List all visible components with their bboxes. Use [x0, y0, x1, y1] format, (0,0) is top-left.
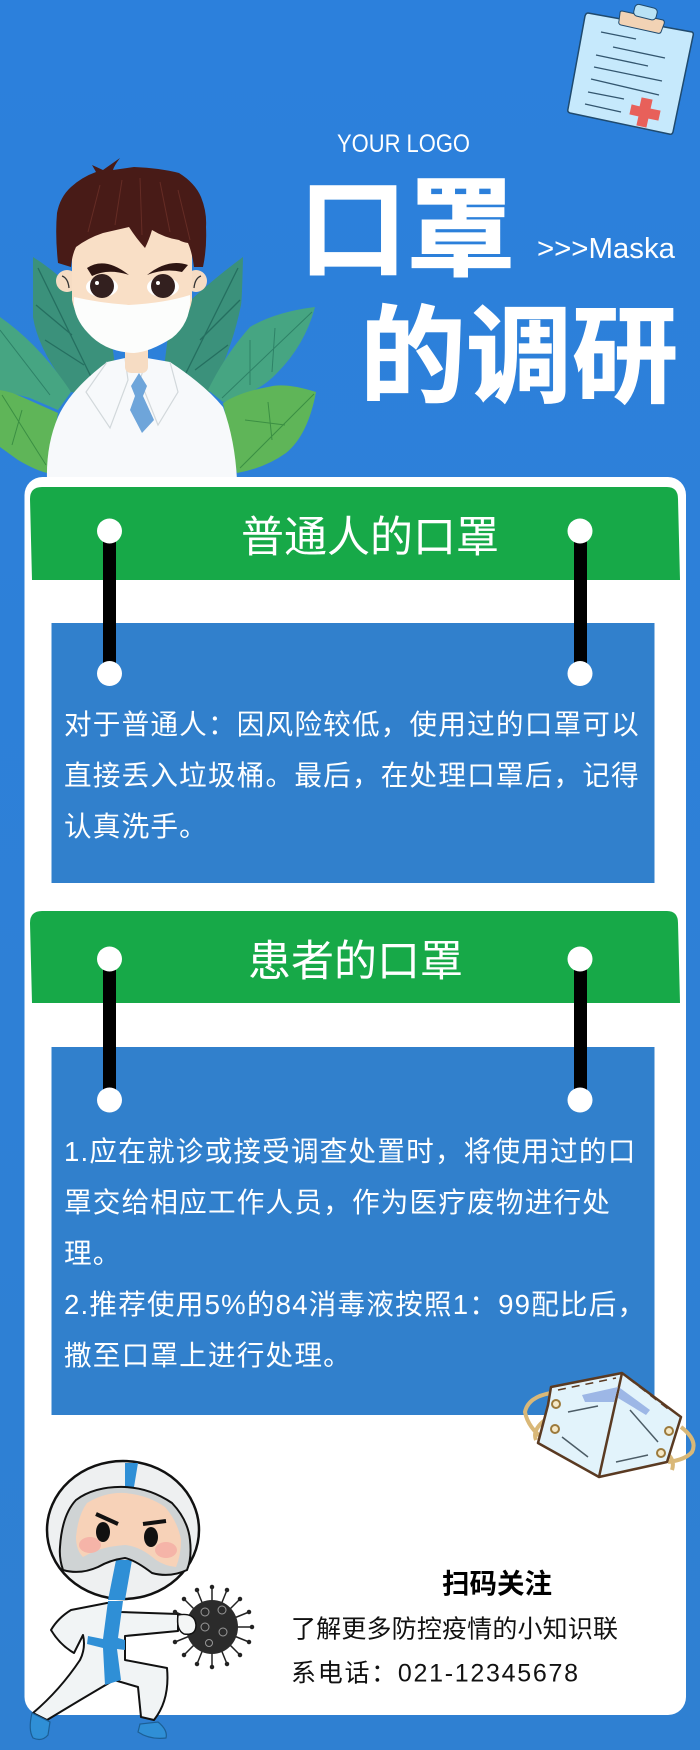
heading bar	[30, 911, 680, 1003]
panel: white card	[24, 477, 686, 1715]
body text: 撒至口罩上进行处理。	[64, 1340, 352, 1371]
shirt	[47, 358, 237, 480]
boots	[30, 1713, 50, 1739]
title: 口罩	[299, 169, 515, 290]
footer text	[291, 1568, 618, 1688]
body text: 2.推荐使用5%的84消毒液按照1：99配比后，	[64, 1289, 646, 1320]
content box	[52, 1047, 654, 1415]
head	[56, 158, 207, 345]
title: 的调研	[360, 299, 678, 417]
heading: 普通人的口罩	[241, 514, 499, 562]
helmet	[47, 1461, 199, 1599]
left pin	[97, 518, 122, 686]
eyes	[86, 277, 118, 297]
icon: clipboard	[568, 4, 693, 134]
body text: 对于普通人：因风险较低，使用过的口罩可以	[64, 709, 640, 740]
right pin	[568, 518, 592, 686]
leaves behind the man	[0, 257, 316, 473]
heading: 患者的口罩	[248, 938, 463, 986]
right pin	[568, 946, 592, 1112]
eyebrows	[87, 263, 188, 276]
title	[299, 169, 678, 417]
body text: 理。	[64, 1238, 122, 1269]
body text: 直接丢入垃圾桶。最后，在处理口罩后，记得	[64, 760, 640, 791]
footer text: 扫码关注	[442, 1568, 552, 1599]
heading bar	[30, 487, 680, 580]
icon: surgical mask	[525, 1373, 694, 1477]
hair	[56, 158, 206, 267]
footer text: 了解更多防控疫情的小知识联	[291, 1616, 618, 1644]
content box	[52, 623, 654, 883]
visor	[60, 1487, 191, 1575]
virus	[175, 1587, 252, 1667]
footer text: 系电话：021-12345678	[291, 1660, 578, 1688]
neck	[125, 340, 148, 373]
left pin	[97, 946, 122, 1112]
section: patients	[30, 911, 680, 1415]
suit body	[33, 1603, 178, 1720]
body text	[64, 1136, 646, 1371]
body text: 认真洗手。	[64, 811, 208, 842]
body text: 1.应在就诊或接受调查处置时，将使用过的口	[64, 1136, 636, 1167]
suit blue tape	[87, 1601, 125, 1685]
body text	[64, 709, 640, 842]
logo text: YOUR LOGO	[337, 130, 470, 158]
subtitle: >>>Maska	[537, 233, 676, 265]
illustration: protective suit character with virus	[30, 1461, 252, 1739]
face	[76, 1493, 181, 1567]
tie	[130, 373, 154, 433]
body text: 罩交给相应工作人员，作为医疗废物进行处	[64, 1187, 611, 1218]
glove	[178, 1614, 196, 1634]
illustration: man with mask and leaves	[0, 158, 316, 480]
face mask	[74, 295, 190, 353]
section: ordinary people	[30, 487, 680, 883]
